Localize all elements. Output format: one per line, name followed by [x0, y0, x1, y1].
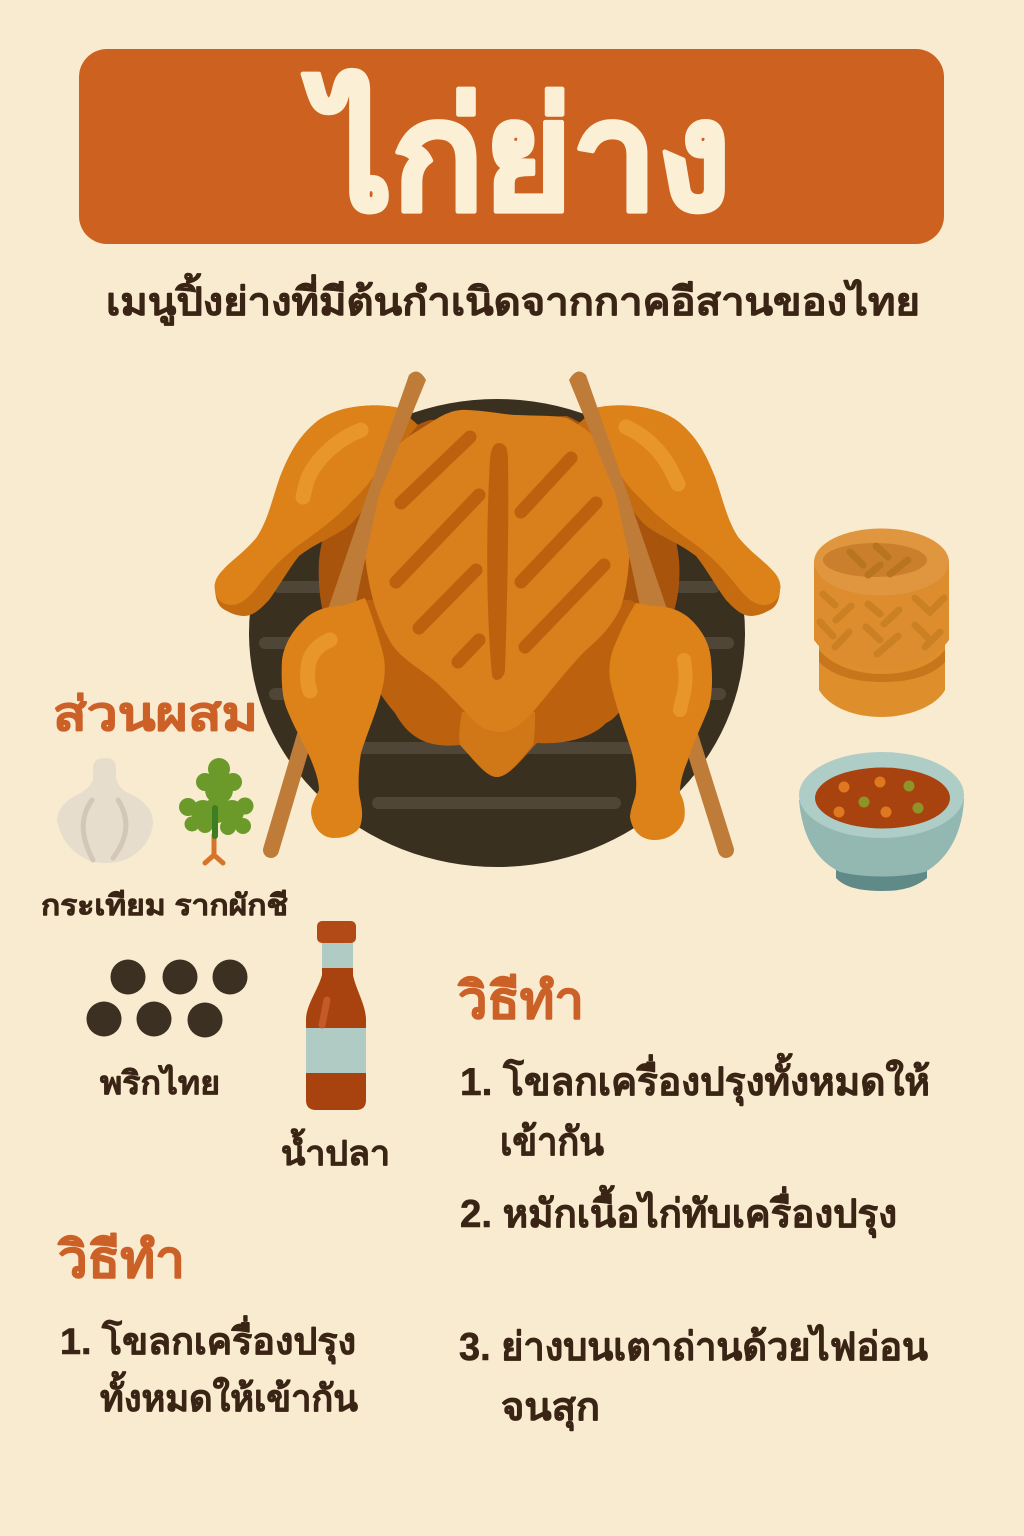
icon: peppercorns [86, 960, 248, 1038]
label: fish sauce: น้ำปลา [281, 1128, 390, 1173]
steps (right): 2. หมักเนื้อไก่ทับเครื่องปรุง [460, 1185, 897, 1238]
highlight [680, 660, 686, 710]
right wing [577, 405, 780, 616]
steps (left) [60, 1315, 358, 1419]
title: ไก่ย่าง [302, 70, 731, 242]
chicken breast [365, 410, 630, 732]
label: garlic and cilantro root: กระเทียม รากผักชี [41, 890, 288, 922]
chicken lower body [345, 600, 650, 777]
steps (right): 3. ย่างบนเตาถ่านด้วยไฟอ่อน [459, 1324, 928, 1369]
wing highlight [626, 427, 678, 484]
label: pepper: พริกไทย [100, 1064, 220, 1101]
subtitle: เมนูปิ้งย่างที่มีต้นกำเนิดจากกาคอีสานของไทย [106, 273, 920, 326]
upper skewers [327, 371, 668, 620]
left wing [215, 405, 418, 616]
steps (right): จนสุก [501, 1386, 600, 1431]
left drumstick [282, 598, 385, 838]
heading: method (left): วิธีทำ [57, 1231, 185, 1288]
steps (right): เข้ากัน [500, 1121, 604, 1164]
steps (left): 1. โขลกเครื่องปรุง [60, 1315, 356, 1365]
illustration: grilled chicken on round grill [215, 371, 780, 867]
icon: fish sauce bottle [306, 921, 366, 1110]
bowl rim [799, 752, 964, 838]
chicken tail [459, 712, 535, 777]
inner basket [823, 543, 927, 577]
icon: garlic [57, 758, 153, 863]
sauce [815, 768, 950, 828]
steps (right): 1. โขลกเครื่องปรุงทั้งหมดให้ [460, 1053, 930, 1106]
lower skewers [271, 735, 726, 850]
basket band [819, 650, 945, 682]
center mark [487, 443, 508, 680]
sauce dots [834, 776, 924, 818]
icon: cilantro root [179, 758, 254, 863]
right drumstick [609, 603, 712, 840]
rim [814, 528, 949, 596]
illustration: bowl of dipping sauce [799, 752, 964, 891]
grill [249, 399, 745, 867]
wing highlight [303, 430, 361, 497]
heading: method (right): วิธีทำ [457, 972, 584, 1029]
lower basket [819, 640, 945, 717]
upper basket [814, 562, 949, 670]
steps (left): ทั้งหมดให้เข้ากัน [100, 1371, 358, 1419]
illustration: sticky rice basket [814, 528, 949, 717]
weave marks [820, 546, 944, 654]
chicken back [319, 416, 679, 660]
bowl foot [836, 865, 927, 891]
grill marks [396, 437, 604, 662]
steps (right) [459, 1053, 930, 1431]
bowl body [799, 798, 964, 876]
highlight [308, 640, 330, 691]
heading: ingredients: ส่วนผสม [53, 687, 258, 740]
title banner [79, 49, 944, 244]
